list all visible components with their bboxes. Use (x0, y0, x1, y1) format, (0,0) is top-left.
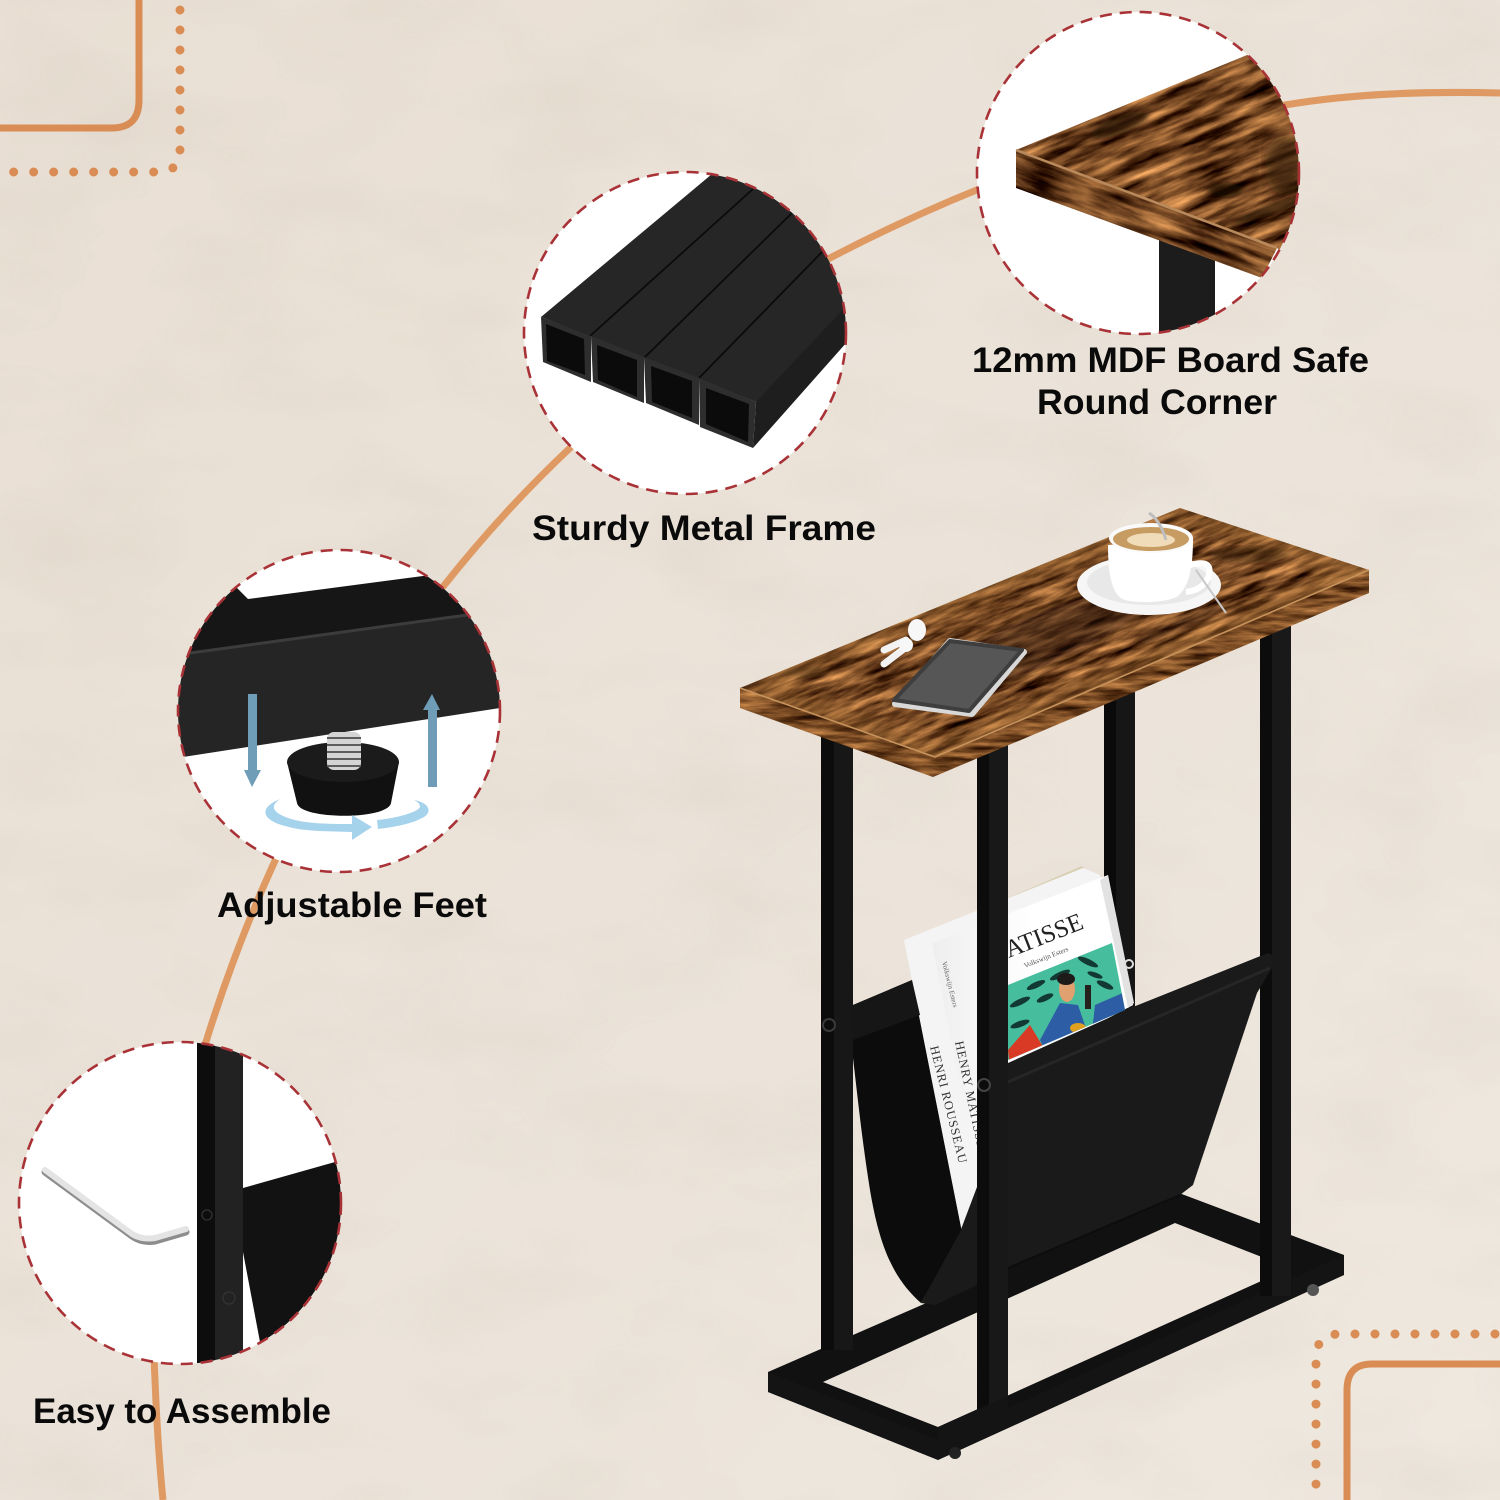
sling back bar (853, 980, 920, 1040)
back leg right (1260, 626, 1291, 1296)
tube separators (590, 189, 822, 378)
panel: tabletop detail circle (976, 10, 1300, 336)
books (904, 866, 1140, 1232)
label: 12mm MDF Board Safe Round Corner (972, 341, 1369, 422)
label: 12mm MDF Board Safe Round Corner: 12mm MDF Board Safe (972, 341, 1369, 380)
label: 12mm MDF Board Safe Round Corner: Round Corner (1037, 383, 1277, 422)
wood edge (740, 571, 1369, 777)
lower frame surface (178, 616, 500, 757)
cover subtitle: Volkswijn Esters (1023, 945, 1070, 970)
label: Easy to Assemble: Easy to Assemble (33, 1392, 331, 1431)
rubber foot (287, 742, 399, 816)
cover title: MATISSE (980, 908, 1087, 972)
down arrow (244, 694, 261, 787)
sling (243, 1162, 341, 1342)
base frame (768, 1193, 1344, 1460)
tube 3 end (644, 357, 699, 425)
earbuds (884, 619, 926, 664)
product: side table (740, 508, 1370, 1460)
smartphone (894, 641, 1024, 714)
tube 2 end (591, 336, 644, 403)
cover painting (1008, 943, 1125, 1060)
front rail overlap (938, 1396, 1008, 1447)
panel: metal frame detail circle (522, 170, 848, 496)
decoration: top-left corner lines (0, 0, 180, 172)
leg (197, 1030, 243, 1370)
front leg (977, 740, 1008, 1413)
spine text: Henri Rousseau: HENRI ROUSSEAU (927, 1044, 970, 1165)
threaded screw (327, 732, 361, 770)
back leg left (821, 735, 853, 1350)
label: Adjustable Feet: Adjustable Feet (217, 886, 487, 925)
panel: easy assembly detail circle (19, 1030, 360, 1370)
bookmark ring (1125, 960, 1133, 968)
tube side face (753, 313, 846, 448)
tube 1 end (541, 317, 591, 382)
decoration: bottom-right corner lines (1316, 1334, 1500, 1500)
up arrow (423, 694, 440, 787)
front book cover (932, 875, 1133, 1180)
rotation arrow (265, 799, 429, 840)
panel: adjustable feet detail circle (176, 548, 502, 874)
wood front edge (1016, 151, 1277, 278)
spine text: author: Volkswijn Esters (940, 961, 959, 1008)
wood top surface (1018, 55, 1299, 250)
tube 4 end (699, 378, 756, 448)
tube top faces (541, 175, 846, 402)
upper frame surface (178, 576, 500, 700)
label: Sturdy Metal Frame: Sturdy Metal Frame (532, 509, 876, 548)
tabletop (740, 508, 1370, 777)
coffee cup and saucer (1077, 513, 1226, 615)
book pages top (938, 866, 1090, 938)
magazine sling back panel (853, 980, 962, 1303)
rear legs (1104, 690, 1135, 1020)
hex key (45, 1170, 186, 1241)
spine text: Henry Matisse: HENRY MATISSE (952, 1040, 989, 1150)
sling front panel (921, 953, 1273, 1305)
back book (904, 868, 1133, 1232)
wood surface (740, 508, 1368, 756)
leg in detail (1159, 240, 1215, 340)
